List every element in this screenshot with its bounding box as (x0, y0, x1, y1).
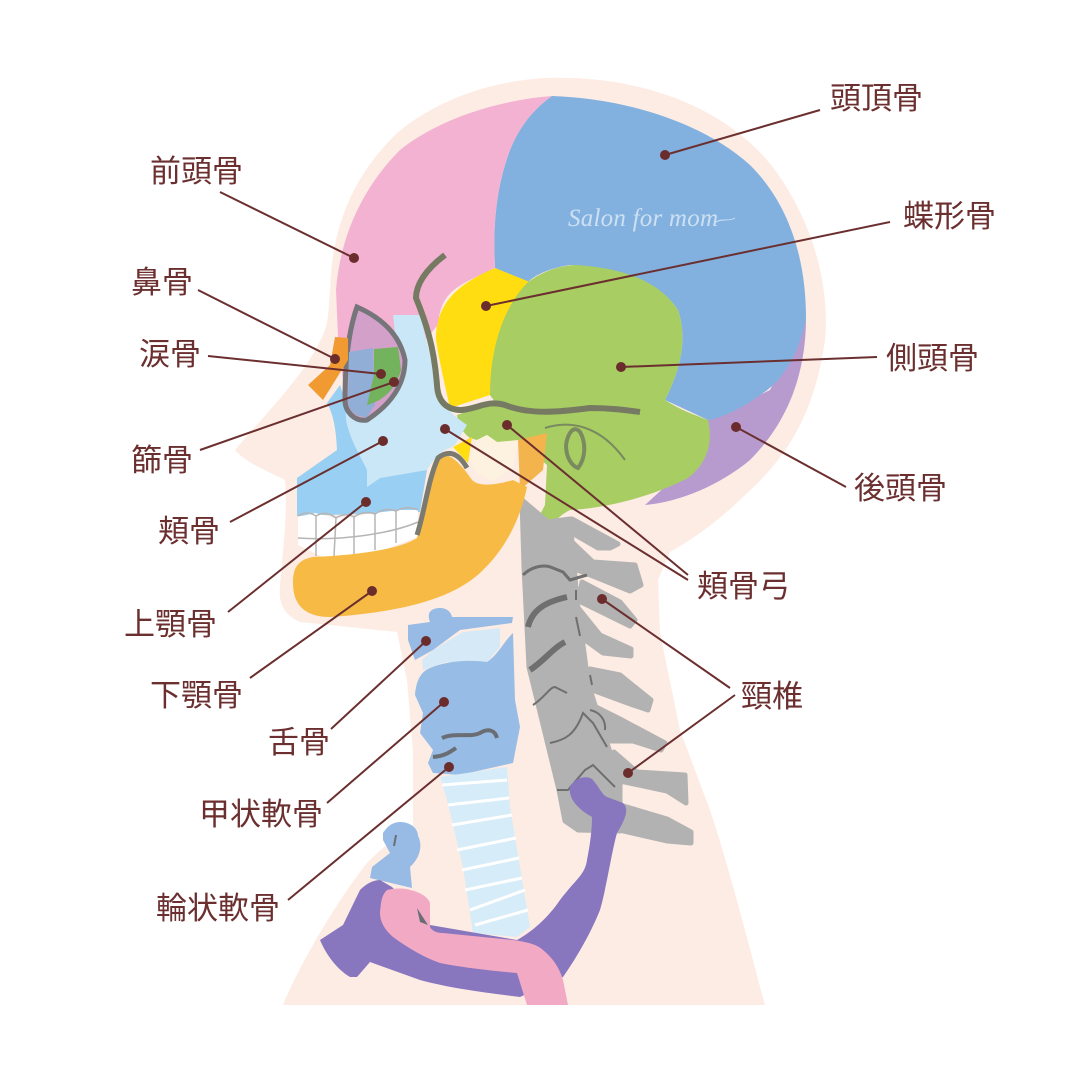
label: zygomatic arch: 頬骨弓 (697, 569, 790, 604)
label: nasal: 鼻骨 (131, 265, 193, 300)
cervical spine (522, 500, 691, 843)
spinous process 4 (579, 609, 631, 656)
spine fractures shading (523, 566, 615, 790)
label: ethmoid: 篩骨 (131, 443, 193, 478)
spinous process 7 (614, 752, 686, 803)
label: parietal: 頭頂骨 (830, 81, 923, 116)
label: frontal: 前頭骨 (150, 154, 243, 189)
spinous process 2 (572, 542, 641, 591)
temporal bone (457, 265, 710, 534)
lacrimal green bone (367, 347, 401, 405)
small laryngeal cartilage (370, 822, 420, 888)
vertebral bodies (522, 500, 620, 831)
label: thyroid cartilage: 甲状軟骨 (199, 797, 323, 832)
watermark: Salon for mom (568, 205, 718, 232)
orbit blue-grey bone (348, 348, 375, 417)
parietal bone (494, 96, 806, 420)
maxilla (297, 385, 427, 516)
sphenoid bone (436, 268, 530, 408)
nasal bone (308, 337, 348, 400)
spinous process 8 (619, 805, 691, 843)
spinous process 3 (579, 582, 635, 626)
trachea upper (422, 628, 500, 670)
temporal detail lines (545, 425, 625, 468)
trachea (440, 767, 530, 937)
hyoid and thyroid (408, 608, 520, 775)
jaw shadow line (417, 453, 467, 535)
teeth (298, 508, 418, 557)
orbit (345, 307, 405, 420)
frontal bone (336, 96, 552, 400)
label: hyoid: 舌骨 (268, 725, 330, 760)
spinous process 5 (590, 669, 651, 710)
sternum pink (380, 888, 568, 1005)
skin silhouette (235, 78, 826, 1005)
temporal suture (416, 255, 640, 412)
leader lines (198, 110, 890, 900)
label: sphenoid: 蝶形骨 (903, 199, 996, 234)
label: cervical vertebrae: 頸椎 (741, 679, 803, 714)
jaw socket (470, 435, 518, 482)
hyoid bone (408, 608, 513, 660)
clavicle purple (320, 777, 626, 997)
small yellow sliver (453, 437, 472, 463)
label: maxilla: 上顎骨 (124, 607, 217, 642)
spinous process 6 (592, 705, 665, 750)
label: occipital: 後頭骨 (854, 471, 947, 506)
cheekbone area (344, 315, 467, 487)
mastoid orange (518, 433, 547, 490)
label: temporal: 側頭骨 (886, 341, 979, 376)
occipital bone (645, 318, 806, 505)
label: mandible: 下顎骨 (150, 678, 243, 713)
label: zygomatic: 頬骨 (158, 514, 220, 549)
leader dots (330, 150, 741, 778)
label: cricoid cartilage: 輪状軟骨 (156, 891, 280, 926)
spinous process 1 (572, 519, 618, 548)
thyroid cartilage (415, 633, 520, 775)
label: lacrimal: 涙骨 (139, 337, 201, 372)
mandible (293, 455, 527, 617)
